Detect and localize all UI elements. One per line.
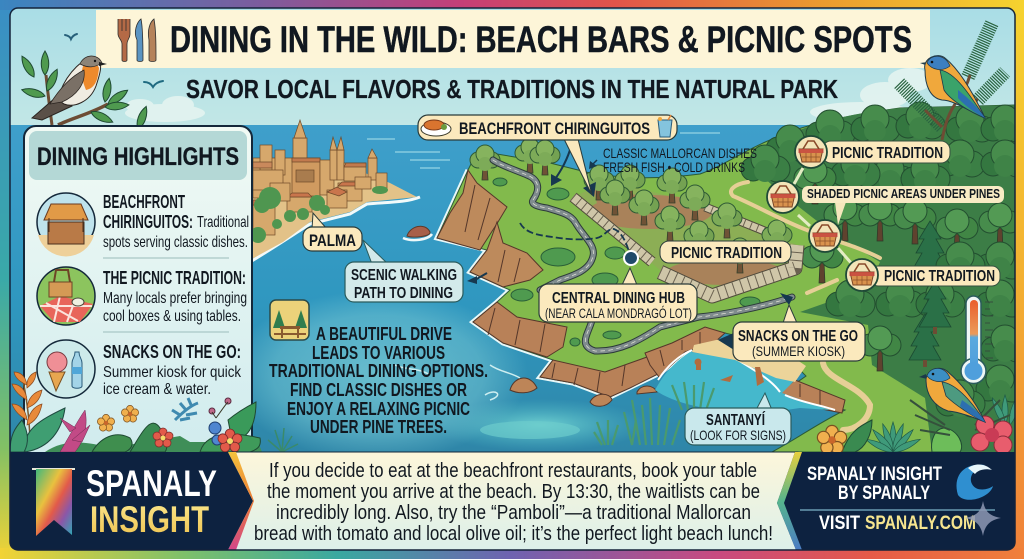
subtitle: SAVOR LOCAL FLAVORS & TRADITIONS IN THE NATURAL PARK (186, 74, 838, 104)
icon: fork and knives (118, 19, 156, 62)
text: a beautiful drive: LEADS TO VARIOUS (312, 343, 445, 363)
main land (437, 105, 1016, 452)
callout: picnic tradition grove: PICNIC TRADITION (671, 245, 782, 262)
marker: picnic tradition 1 (795, 136, 950, 168)
swimmers (694, 358, 764, 386)
text: snacks on the go (103, 342, 242, 398)
footer: spanaly insight logo (10, 452, 254, 550)
footer: spanaly insight logo: SPANALY (86, 463, 217, 504)
callout: snacks on the go: SNACKS ON THE GO (738, 328, 858, 345)
driving road (493, 160, 792, 351)
small rock (403, 226, 432, 240)
footer: spanaly insight logo: INSIGHT (90, 499, 209, 540)
tip text (254, 460, 773, 545)
callout: beachfront chiringuitos: BEACHFRONT CHIRINGUITOS (459, 119, 650, 138)
callout: scenic walking path (345, 240, 463, 302)
panel heading: DINING HIGHLIGHTS (37, 143, 239, 171)
icon: ice cream and water (37, 340, 95, 398)
pine branches top right (899, 23, 1005, 140)
dashed walking trail (519, 222, 630, 250)
arrows to coast (467, 150, 793, 305)
tip text: incredibly long. Also, try the “Pamboli”—a traditional Mallorcan (276, 502, 751, 524)
birds in the sky (65, 34, 163, 87)
bushes (493, 178, 760, 346)
text: a beautiful drive: ENJOY A RELAXING PICNIC (287, 399, 470, 419)
thermometer (961, 296, 993, 384)
hibiscus (971, 416, 1012, 454)
callout: scenic walking path: SCENIC WALKING (351, 267, 457, 284)
title banner (96, 10, 930, 68)
text: the picnic tradition: THE PICNIC TRADITION: (103, 268, 246, 288)
text: the picnic tradition (103, 268, 247, 325)
icon: wave (957, 464, 993, 500)
foliage bottom left (10, 372, 298, 452)
callout: beachfront chiringuitos (418, 115, 677, 195)
clouds (125, 68, 932, 122)
lower right plants (842, 395, 1021, 455)
lower cliffs (473, 302, 845, 413)
callout: palma: PALMA (309, 231, 356, 250)
text: beachfront chiringuitos: CHIRINGUITOS: (103, 212, 193, 232)
icon: picnic (37, 267, 95, 325)
bluebird lower (919, 368, 985, 422)
marker: picnic tradition 2: PICNIC TRADITION (884, 268, 995, 285)
icon: fried fish plate (421, 120, 451, 136)
text: a beautiful drive: TRADITIONAL DINING OPTIONS. (269, 361, 488, 381)
city buildings (253, 120, 387, 235)
callout: central dining hub (539, 268, 697, 322)
callout: palma (303, 213, 362, 251)
turquoise bay (655, 350, 835, 412)
text: beachfront chiringuitos (103, 192, 249, 251)
footer: visit spanaly: VISIT (819, 513, 860, 534)
footer: visit spanaly (777, 452, 1015, 550)
text: beachfront chiringuitos: BEACHFRONT (103, 192, 185, 212)
bluebird top (920, 56, 985, 118)
footer: visit spanaly: BY SPANALY (838, 483, 930, 504)
footer: visit spanaly: SPANALY INSIGHT (807, 464, 942, 485)
beach (692, 338, 806, 382)
icon: rainbow ribbon (32, 469, 75, 536)
text: the picnic tradition: Many locals prefer bringing (103, 290, 247, 307)
callout: picnic tradition grove (660, 241, 791, 263)
text: snacks on the go: SNACKS ON THE GO: (103, 342, 241, 362)
text: classic mallorcan dishes: FRESH FISH • COLD DRINKS (603, 159, 745, 175)
grove ground (579, 188, 795, 288)
sky (10, 8, 1015, 126)
tip text: the moment you arrive at the beach. By 13:30, the waitlists can be (267, 481, 760, 503)
text: the picnic tradition: cool boxes & using tables. (103, 308, 241, 325)
connector lines between picnic baskets (794, 168, 852, 264)
orange flower (817, 425, 847, 454)
footer: tip panel (228, 452, 798, 550)
ferns around bird (910, 400, 1010, 435)
tan walking paths (731, 182, 880, 430)
upper cliff (437, 170, 543, 287)
callout: central dining hub: CENTRAL DINING HUB (552, 290, 685, 307)
callout: snacks on the go (719, 305, 865, 361)
robin on branch (19, 51, 150, 130)
tip text: If you decide to eat at the beachfront restaurants, book your table (269, 460, 757, 482)
icon: sparkle (965, 501, 1001, 536)
callout: santanyi: SANTANYÍ (706, 410, 765, 429)
marker: picnic tradition 1: PICNIC TRADITION (832, 145, 943, 162)
seagrass (594, 382, 714, 445)
panel: dining highlights (24, 126, 252, 466)
text: a beautiful drive: UNDER PINE TREES. (310, 417, 447, 437)
text: beachfront chiringuitos: Traditional (197, 214, 249, 231)
surf line around coast (437, 170, 690, 397)
text: beachfront chiringuitos: spots serving classic dishes. (103, 234, 248, 251)
palma peninsula (250, 120, 420, 262)
stone wall (573, 197, 797, 296)
olive trees (470, 138, 792, 273)
sea (10, 125, 844, 452)
callout: snacks on the go: (SUMMER KIOSK) (752, 343, 845, 359)
callout: scenic walking path: PATH TO DINING (354, 285, 453, 302)
icon: chiringuito (37, 193, 95, 256)
tip text: bread with tomato and local olive oil; it’s the perfect light beach lunch! (254, 523, 773, 545)
forest (741, 102, 1024, 452)
icon: cold drink (658, 115, 672, 137)
marker: picnic basket (809, 220, 841, 252)
footer: visit spanaly: SPANALY.COM (865, 513, 976, 534)
text: a beautiful drive: A BEAUTIFUL DRIVE (316, 324, 452, 344)
marker: central dot (623, 250, 639, 266)
callout: santanyi: (LOOK FOR SIGNS) (690, 427, 786, 443)
panel heading (29, 131, 247, 180)
rocks in water (510, 378, 657, 406)
marker: shaded picnic areas (767, 181, 1004, 225)
marker: picnic tradition 2 (846, 259, 1000, 291)
callout: santanyi (685, 393, 791, 445)
text: classic mallorcan dishes: CLASSIC MALLORCAN DISHES (603, 145, 757, 161)
icon: picnic table under trees (270, 300, 309, 340)
text: snacks on the go: Summer kiosk for quick (103, 364, 242, 381)
text: a beautiful drive (269, 324, 488, 437)
text: snacks on the go: ice cream & water. (103, 381, 211, 398)
callout: central dining hub: (NEAR CALA MONDRAGÓ LOT) (545, 306, 692, 321)
text: a beautiful drive: FIND CLASSIC DISHES OR (290, 380, 467, 400)
text: classic mallorcan dishes (603, 145, 757, 175)
